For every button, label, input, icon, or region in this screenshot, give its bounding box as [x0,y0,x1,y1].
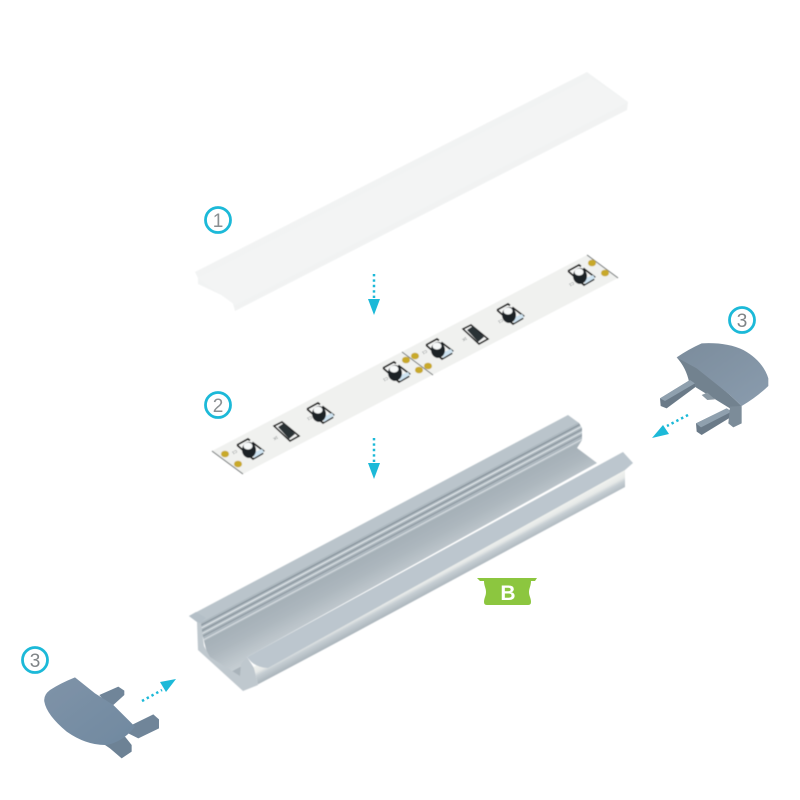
arrow: diffuser down to strip [368,274,380,315]
cap upper prong [660,380,695,408]
cap plate [677,343,768,406]
arrow: strip down to channel [368,438,380,479]
number badge 3 left [22,648,48,672]
LED chip 2 [307,403,335,423]
LED chip 4 [426,339,454,359]
profile badge B [477,578,537,605]
arrow: left cap into channel [142,679,176,701]
resistor 2 [463,325,488,344]
left cap lower prong [128,714,159,738]
end cap right [660,343,768,435]
channel inner walls and ribs [196,414,597,676]
LED strip [212,255,618,474]
cap body [677,357,742,408]
number badge 1: 1 [213,211,223,232]
channel outer side [254,470,626,684]
cap foot [728,406,742,427]
component labels: C1 [231,449,238,456]
resistor 1 [274,422,299,441]
number badge 2: 2 [213,396,223,417]
number badge 2 [206,392,230,418]
component labels: C1 [382,376,389,383]
end cap left [44,677,159,758]
LED chip 5 [497,304,525,324]
strip board [212,255,618,474]
diffuser cover [195,72,628,311]
channel front profile [197,622,258,691]
component labels: C1 [497,318,504,325]
channel top flange tip [189,612,206,623]
left cap plate [44,677,135,745]
number badge 3 left: 3 [30,651,40,672]
component labels: 1K [272,435,279,442]
component labels: C1 [306,415,313,422]
component labels: C1 [421,349,428,356]
LED chip 6 [568,265,596,285]
cap clip detail [702,393,715,400]
component labels [231,281,575,456]
channel right lip [247,452,633,668]
number badge 1 [206,208,230,232]
component labels: 1K [461,336,468,343]
profile badge B: B [500,582,516,605]
solder pads [221,260,609,467]
left cap upper prong [99,687,124,705]
strip cut lines [212,255,618,474]
number badge 3 right [730,308,754,332]
LED chip 3 [383,362,411,382]
aluminium channel [188,414,634,692]
arrow: right cap into channel [652,415,688,438]
number badge 3 right: 3 [737,311,747,332]
component labels: C1 [568,281,575,288]
cap lower prong [696,408,732,435]
left cap foot [105,737,132,758]
LED chip 1 [237,439,265,459]
